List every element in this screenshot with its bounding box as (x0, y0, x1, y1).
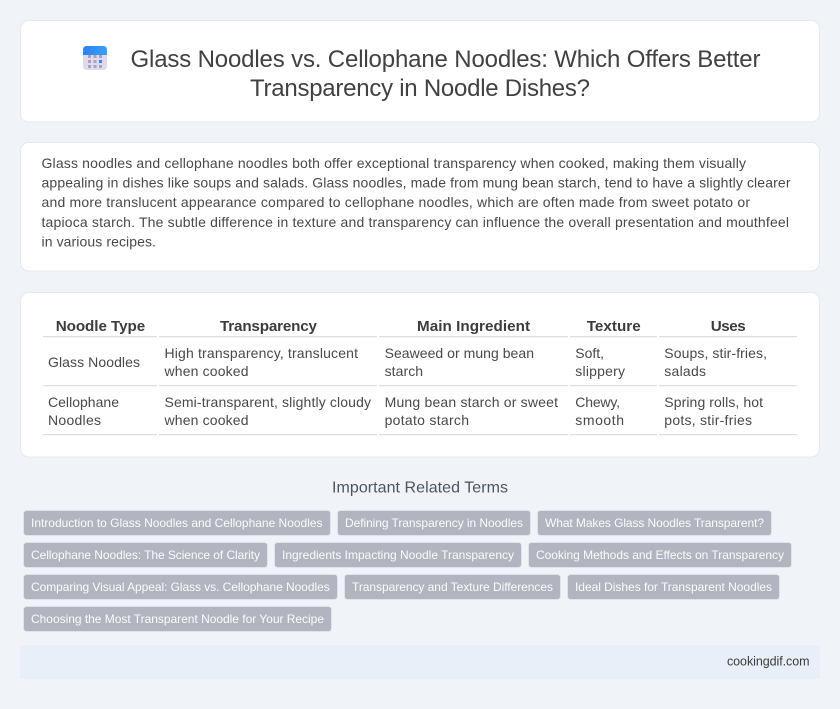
heading: important related terms: Important Related Terms (332, 480, 508, 496)
tag (568, 574, 780, 600)
tag: Cellophane Noodles: The Science of Clarity (31, 548, 260, 562)
tag (24, 606, 332, 632)
tag (274, 542, 522, 568)
tag (538, 510, 772, 536)
table row: glass noodles: Seaweed or mung bean (385, 345, 534, 361)
table row: cellophane noodles: when cooked (164, 412, 248, 428)
header card (20, 20, 820, 122)
table row: glass noodles: salads (664, 363, 706, 379)
table row: cellophane noodles: Spring rolls, hot (664, 394, 763, 410)
table header row (56, 318, 746, 335)
footer bar: cookingdif.com (727, 655, 810, 669)
tag: Comparing Visual Appeal: Glass vs. Cellophane Noodles (31, 580, 330, 594)
table row: glass noodles: slippery (575, 363, 625, 379)
tag (344, 574, 560, 600)
panel: introduction paragraph: tapioca starch. The subtle difference in texture and transparency can influence the overall presentation and mouthfeel (42, 214, 789, 230)
table header row: Noodle Type (56, 318, 145, 335)
table row: glass noodles: when cooked (164, 363, 248, 379)
table row: cellophane noodles: pots, stir-fries (664, 412, 752, 428)
tag: Ideal Dishes for Transparent Noodles (575, 580, 772, 594)
tag: Choosing the Most Transparent Noodle for Your Recipe (31, 612, 324, 626)
table row: cellophane noodles: smooth (575, 412, 624, 428)
tag: Cooking Methods and Effects on Transparency (536, 548, 784, 562)
tag (24, 510, 330, 536)
related term tags (24, 510, 792, 632)
table row: cellophane noodles (48, 394, 763, 428)
table row: glass noodles: Soft, (575, 345, 604, 361)
tag: Introduction to Glass Noodles and Cellophane Noodles (31, 516, 322, 530)
tag (24, 542, 268, 568)
table row: cellophane noodles: Cellophane (48, 394, 119, 410)
tag (338, 510, 530, 536)
panel: introduction paragraph: appealing in dishes like soups and salads. Glass noodles, made from mung bean starch, tend to have a slightly clearer (42, 174, 791, 190)
panel: introduction paragraph: in various recipes. (42, 233, 156, 249)
table row: cellophane noodles: Mung bean starch or sweet (385, 394, 558, 410)
table row: cellophane noodles: potato starch (385, 412, 469, 428)
table header row: Texture (587, 318, 641, 335)
table header row: Uses (711, 318, 746, 335)
tag (528, 542, 792, 568)
footer bar (20, 645, 820, 679)
table row: glass noodles: Soups, stir-fries, (664, 345, 767, 361)
panel: introduction paragraph: and more translucent appearance compared to cellophane noodles, which are often made from sweet potato or (42, 194, 750, 210)
table row: glass noodles: High transparency, translucent (164, 345, 358, 361)
table row: glass noodles: Glass Noodles (48, 354, 140, 370)
table header row: Transparency (220, 318, 318, 335)
tag: Ingredients Impacting Noodle Transparency (282, 548, 514, 562)
panel: introduction paragraph: Glass noodles and cellophane noodles both offer exceptional transparency when cooked, making them visually (42, 155, 746, 171)
icon: calendar (83, 46, 107, 70)
tag: What Makes Glass Noodles Transparent? (545, 516, 764, 530)
table row: cellophane noodles: Noodles (48, 412, 101, 428)
table header row: Main Ingredient (417, 318, 530, 335)
title (130, 46, 760, 102)
table row: glass noodles: starch (385, 363, 423, 379)
title: Glass Noodles vs. Cellophane Noodles: Which Offers Better (130, 46, 760, 73)
tag: Defining Transparency in Noodles (345, 516, 523, 530)
panel: introduction paragraph (20, 142, 820, 271)
table row: glass noodles (48, 345, 767, 379)
table row: cellophane noodles: Chewy, (575, 394, 620, 410)
panel: comparison table (20, 292, 820, 457)
tag: Transparency and Texture Differences (352, 580, 553, 594)
title: Transparency in Noodle Dishes? (250, 75, 590, 102)
tag (24, 574, 338, 600)
table row: cellophane noodles: Semi-transparent, slightly cloudy (164, 394, 371, 410)
